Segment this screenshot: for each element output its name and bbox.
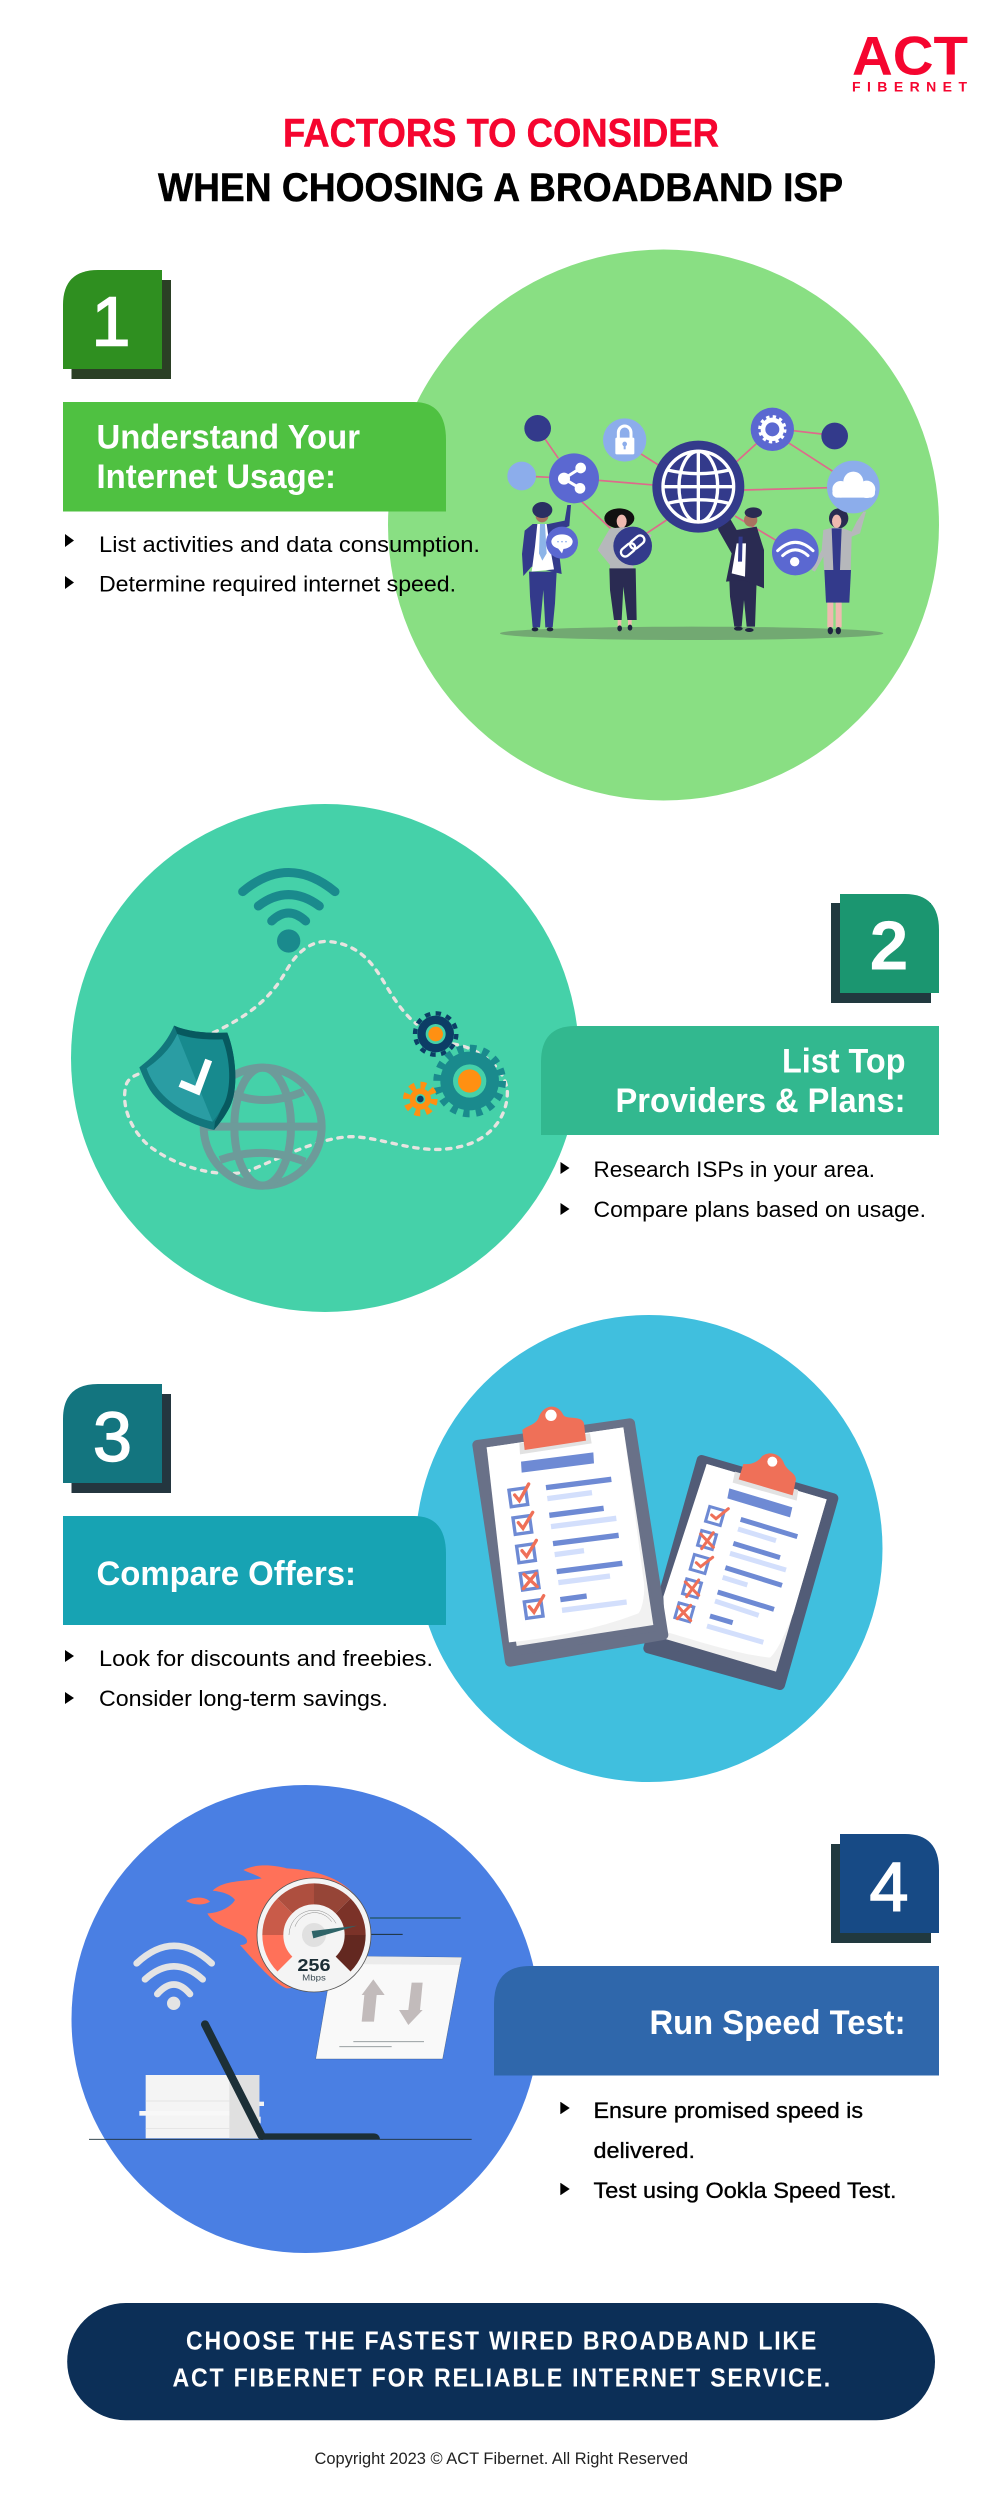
panel: step 3 circle with illustration: [416, 1315, 882, 1782]
icon: globe: [204, 1068, 322, 1186]
right clipboard: [648, 1453, 833, 1685]
bullet list: step 4: Ensure promised speed is: [594, 2098, 863, 2123]
logo: ACT Fibernet: FIBERNET: [852, 78, 967, 94]
number badge 4: 4: [870, 1848, 908, 1926]
icon: globe: [652, 441, 744, 533]
figure: man with chat bubble: [522, 502, 571, 631]
panel: step 4 circle with illustration: [72, 1785, 540, 2253]
dashed route: [125, 941, 507, 1174]
callout: call to action pill: [67, 2303, 935, 2420]
figure: woman holding cloud: [812, 508, 866, 634]
speedometer gauge: 256: [297, 1955, 331, 1975]
browser window with arrows: [316, 1956, 462, 2059]
bullet list: step 4: delivered.: [594, 2138, 695, 2163]
bullet list: step 2: [560, 1157, 926, 1222]
laptop and papers: [89, 2024, 472, 2139]
illustration: people holding network icons: [500, 408, 883, 640]
bullet list: step 1: [65, 532, 480, 596]
copyright footer: Copyright 2023 © ACT Fibernet. All Right Reserved: [314, 2449, 688, 2468]
icon: chat bubble: [546, 527, 578, 559]
bullet list: step 4: Test using Ookla Speed Test.: [594, 2178, 896, 2203]
callout: call to action pill: CHOOSE THE FASTEST WIRED BROADBAND LIKE: [186, 2326, 818, 2356]
bullet list: step 2: Compare plans based on usage.: [594, 1197, 926, 1222]
heading bar: step 1: Understand Your: [96, 418, 360, 456]
bullet list: step 3: Look for discounts and freebies.: [99, 1646, 433, 1671]
heading bar: step 1: [63, 402, 446, 512]
figure: man holding globe: [717, 507, 764, 632]
number badge 3: 3: [93, 1398, 132, 1476]
panel: step 2 circle with illustration: [71, 804, 579, 1312]
heading bar: step 4: Run Speed Test:: [650, 2004, 906, 2042]
callout: call to action pill: ACT FIBERNET FOR RELIABLE INTERNET SERVICE.: [172, 2362, 832, 2392]
bullet list: step 1: List activities and data consumption.: [99, 532, 480, 557]
bullet list: step 3: Consider long-term savings.: [99, 1686, 388, 1711]
flame: [186, 1865, 353, 1988]
number badge 1: 1: [92, 282, 130, 360]
illustration: two clipboards: [477, 1407, 833, 1685]
logo: ACT Fibernet: ACT: [852, 24, 968, 86]
number badge 2: 2: [870, 906, 908, 984]
heading bar: step 2: Providers & Plans:: [616, 1082, 906, 1120]
speedometer gauge: [257, 1878, 371, 1992]
icon: chain link: [613, 527, 652, 565]
title: FACTORS TO CONSIDER: [283, 112, 719, 156]
heading bar: step 3: [63, 1516, 446, 1625]
icon: lock: [603, 418, 646, 462]
heading bar: step 2: [541, 1026, 939, 1135]
heading bar: step 1: Internet Usage:: [96, 458, 336, 496]
icon: gear: [751, 408, 794, 451]
title: WHEN CHOOSING A BROADBAND ISP: [158, 166, 843, 210]
illustration: wifi, shield, globe and gears: [125, 872, 507, 1186]
heading bar: step 4: [494, 1966, 939, 2076]
panel: step 1 circle with illustration: [388, 250, 939, 800]
left clipboard: [477, 1407, 663, 1662]
bullet list: step 1: Determine required internet speed.: [99, 572, 456, 596]
number badge 1: [63, 270, 171, 379]
speed lines: [370, 1918, 461, 1934]
speedometer gauge: Mbps: [302, 1973, 327, 1983]
number badge 4: [831, 1834, 939, 1943]
heading bar: step 2: List Top: [782, 1042, 906, 1080]
icon: wifi signal: [243, 872, 335, 953]
icon: wifi: [772, 529, 819, 575]
bullet list: step 2: Research ISPs in your area.: [594, 1157, 875, 1182]
illustration: speed test: [89, 1865, 472, 2139]
icon: cloud: [827, 461, 880, 513]
bullet list: step 3: [65, 1646, 433, 1711]
icon: wifi signal: [137, 1946, 212, 2010]
icon: shield with check: [139, 1026, 235, 1130]
icon: gears: [406, 1013, 502, 1113]
icon: share: [549, 453, 599, 503]
figure: woman with link icon: [598, 508, 652, 631]
heading bar: step 3: Compare Offers:: [96, 1555, 356, 1593]
number badge 3: [63, 1384, 171, 1493]
title: [158, 112, 843, 210]
bullet list: step 4: [560, 2098, 896, 2203]
number badge 2: [831, 894, 939, 1003]
